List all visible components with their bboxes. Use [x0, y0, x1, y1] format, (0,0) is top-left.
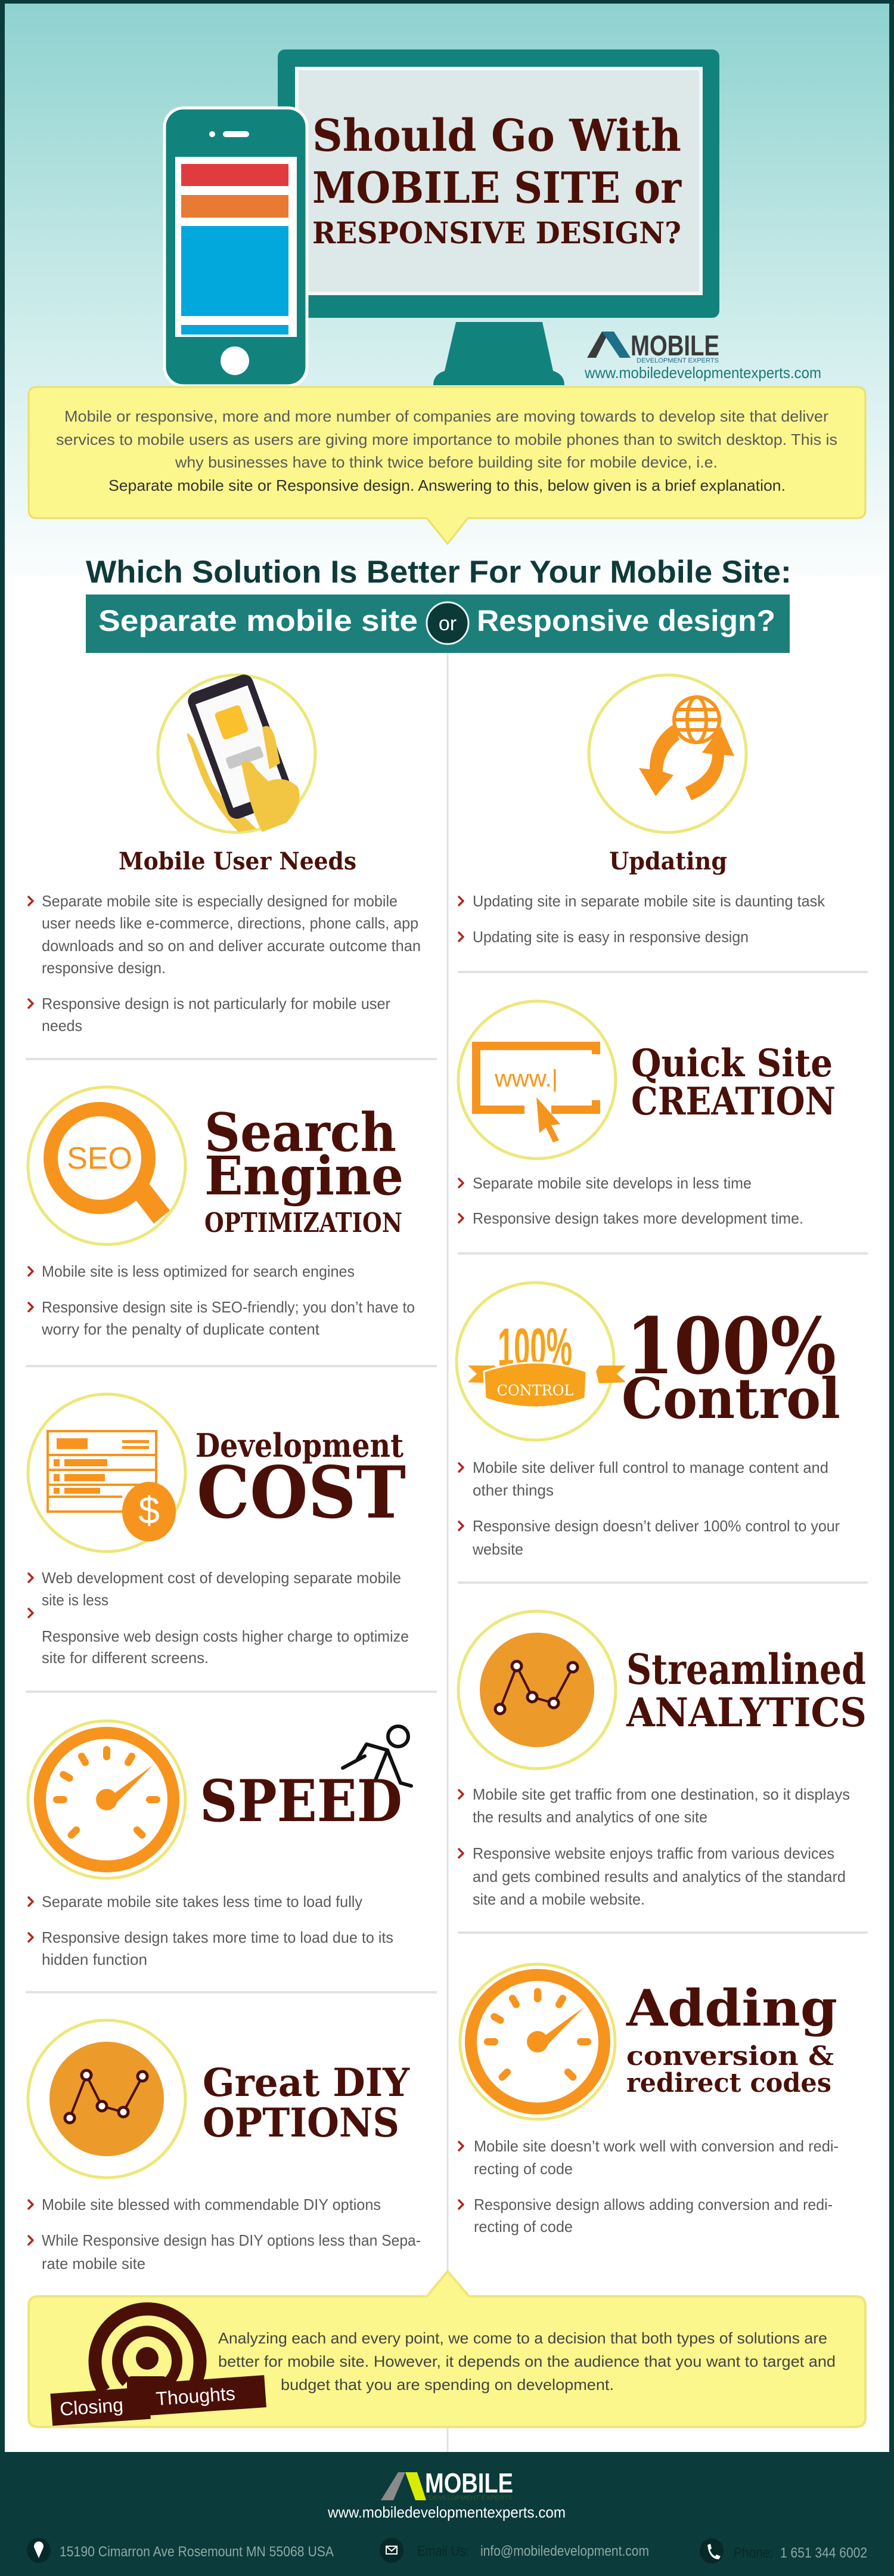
panel: search engine optimization: Mobile site is less optimized for search engines [42, 1262, 355, 1280]
icon: 100% control badge: 100% [498, 1318, 572, 1377]
panel: search engine optimization: OPTIMIZATION [204, 1207, 402, 1239]
panel: mobile user needs: downloads and so on and deliver accurate outcome than [42, 937, 421, 955]
callout: closing thoughts [29, 2271, 865, 2427]
contact: address: 15190 Cimarron Ave Rosemount MN 55068 USA [60, 2544, 334, 2560]
contact: address [27, 2538, 334, 2563]
panel: adding conversion & redirect codes: redirect codes [626, 2068, 831, 2098]
intro callout: Separate mobile site or Responsive design. Answering to this, below given is a brief explanation. [108, 476, 786, 494]
panel: speed: Separate mobile site takes less time to load fully [42, 1893, 362, 1911]
dividers [26, 971, 868, 1993]
panel: development cost: COST [197, 1451, 406, 1535]
panel: adding conversion & redirect codes: conversion & [626, 2041, 834, 2072]
panel: streamlined analytics [458, 1611, 867, 1908]
logo: mobile development experts: MOBILE [631, 330, 719, 362]
panel: development cost: Responsive web design costs higher charge to optimize [42, 1627, 409, 1645]
panel: 100% control: 100% [626, 1301, 836, 1392]
title: RESPONSIVE DESIGN? [312, 215, 681, 250]
intro callout [29, 387, 865, 544]
panel: development cost [28, 1394, 409, 1667]
panel: development cost: site for different screens. [42, 1649, 209, 1667]
banner: separate or responsive [86, 595, 790, 653]
panel: updating [459, 675, 825, 946]
panel: streamlined analytics: ANALYTICS [626, 1689, 867, 1736]
intro callout: Mobile or responsive, more and more number of companies are moving towards to develop site that deliver [64, 407, 828, 425]
panel: 100% control: Mobile site deliver full control to manage content and [473, 1459, 828, 1476]
icon: 100% control badge: CONTROL [497, 1382, 573, 1399]
panel: adding conversion & redirect codes: Responsive design allows adding conversion and redi- [474, 2196, 833, 2213]
icon: closing thoughts broadcast [50, 2309, 266, 2426]
panel: adding conversion & redirect codes: recting of code [474, 2160, 573, 2178]
panel: great DIY options: Great DIY [203, 2060, 410, 2106]
panel: adding conversion & redirect codes [459, 1964, 839, 2236]
panel: streamlined analytics: Mobile site get traffic from one destination, so it displays [473, 1785, 850, 1803]
panel: quick site creation: CREATION [631, 1079, 836, 1124]
panel: mobile user needs [29, 672, 421, 1035]
callout: closing thoughts: better for mobile site. However, it depends on the audience that you want to target and [218, 2352, 836, 2370]
icon: DIY chart [28, 2020, 185, 2178]
icon: desktop monitor [278, 49, 719, 385]
banner: separate or responsive: Separate mobile site [98, 604, 418, 637]
panel: speed: Responsive design takes more time to load due to its [42, 1928, 393, 1946]
contact: phone: 1 651 344 6002 [780, 2545, 867, 2561]
panel: development cost: Web development cost of developing separate mobile [42, 1569, 401, 1587]
panel: adding conversion & redirect codes: recting of code [474, 2218, 573, 2236]
icon: analytics chart [458, 1611, 616, 1769]
title: MOBILE SITE or [312, 162, 682, 213]
panel: speed: hidden function [42, 1950, 147, 1968]
panel: 100% control: Responsive design doesn’t deliver 100% control to your [473, 1517, 840, 1535]
panel: adding conversion & redirect codes: Mobile site doesn’t work well with conversion and redi- [474, 2137, 839, 2155]
icon: closing thoughts broadcast: Thoughts [155, 2383, 236, 2410]
callout: closing thoughts: Analyzing each and every point, we come to a decision that both types of solutions are [218, 2329, 827, 2347]
contact: phone [700, 2538, 867, 2563]
callout: closing thoughts: budget that you are spending on development. [281, 2376, 614, 2394]
panel: streamlined analytics: and gets combined results and analytics of the standard [473, 1868, 846, 1885]
title: Should Go With [312, 110, 681, 162]
footer: www.mobiledevelopmentexperts.com [327, 2503, 566, 2521]
panel: search engine optimization [28, 1087, 415, 1338]
panel: speed [28, 1721, 411, 1968]
panel: great DIY options: OPTIONS [203, 2100, 399, 2146]
logo: mobile development experts [584, 330, 821, 382]
logo: mobile development experts: DEVELOPMENT EXPERTS [637, 357, 719, 364]
icon: speedometer [28, 1721, 185, 1878]
panel: search engine optimization: Search [204, 1101, 396, 1163]
panel: updating: Updating site in separate mobile site is daunting task [473, 892, 825, 910]
panel: search engine optimization: Engine [204, 1144, 403, 1207]
panel: streamlined analytics: Responsive website enjoys traffic from various devices [473, 1844, 834, 1862]
icon: globe with refresh arrows [589, 675, 746, 832]
panel: 100% control: website [472, 1540, 523, 1558]
panel: great DIY options [28, 2020, 421, 2272]
footer logo [381, 2467, 513, 2501]
panel: speed: SPEED [200, 1767, 402, 1835]
vertical divider [447, 653, 448, 2452]
panel: search engine optimization: Responsive design site is SEO-friendly; you don’t have to [42, 1298, 415, 1316]
panel: great DIY options: Mobile site blessed with commendable DIY options [42, 2196, 381, 2213]
icon: mobile phone [164, 108, 307, 386]
icon: closing thoughts broadcast: Closing [59, 2394, 124, 2420]
panel: streamlined analytics: the results and analytics of one site [473, 1808, 707, 1826]
panel: updating: Updating [609, 847, 727, 875]
panel: streamlined analytics: Streamlined [626, 1645, 866, 1694]
icon: www browser with cursor: www.| [494, 1066, 558, 1092]
panel: development cost: Development [195, 1426, 404, 1465]
panel: mobile user needs: user needs like e-commerce, directions, phone calls, app [42, 914, 418, 932]
panel: 100% control: Control [622, 1366, 840, 1432]
icon: SEO magnifier: SEO [67, 1141, 132, 1176]
footer logo: MOBILE [425, 2467, 513, 2498]
header background [5, 4, 889, 576]
panel: 100% control: other things [473, 1481, 554, 1499]
icon: document with dollar coin: $ [138, 1489, 160, 1532]
icon: SEO magnifier [28, 1087, 185, 1244]
panel: updating: Updating site is easy in responsive design [473, 928, 749, 946]
panel: quick site creation: Quick Site [631, 1041, 833, 1086]
panel: quick site creation [458, 1001, 836, 1227]
footer [0, 2452, 894, 2576]
panel: development cost: site is less [42, 1591, 108, 1609]
panel: streamlined analytics: site and a mobile website. [473, 1890, 645, 1908]
panel: mobile user needs: needs [42, 1017, 82, 1035]
panel: quick site creation: Responsive design takes more development time. [473, 1209, 803, 1227]
banner: separate or responsive: or [439, 612, 457, 635]
panel: great DIY options: While Responsive design has DIY options less than Sepa- [42, 2231, 421, 2249]
panel: mobile user needs: responsive design. [42, 959, 166, 977]
contact: email [380, 2538, 649, 2563]
icon: document with dollar coin [28, 1394, 185, 1552]
panel: search engine optimization: worry for the penalty of duplicate content [41, 1320, 320, 1338]
banner: separate or responsive: Responsive design? [477, 604, 775, 637]
icon: runner [343, 1726, 411, 1786]
contact: email: Email Us: [417, 2543, 469, 2559]
intro callout: services to mobile users as users are giving more importance to mobile phones than to switch desktop. This is [56, 431, 837, 448]
panel: quick site creation: Separate mobile site develops in less time [473, 1174, 752, 1192]
icon: hand holding phone [158, 672, 315, 832]
section heading: Which Solution Is Better For Your Mobile Site: [86, 555, 791, 590]
panel: adding conversion & redirect codes: Adding [626, 1979, 837, 2038]
contact: phone: Phone: [734, 2545, 773, 2561]
footer logo: DEVELOPMENT EXPERTS [429, 2495, 513, 2501]
logo: mobile development experts: www.mobiledevelopmentexperts.com [584, 364, 821, 382]
panel: mobile user needs: Separate mobile site is especially designed for mobile [42, 892, 398, 910]
contact: email: info@mobiledevelopment.com [480, 2543, 649, 2559]
panel: mobile user needs: Responsive design is not particularly for mobile user [42, 995, 390, 1013]
intro callout: why businesses have to think twice before building site for mobile device, i.e. [175, 453, 718, 471]
panel: 100% control [457, 1283, 840, 1558]
icon: www browser with cursor [458, 1001, 616, 1159]
panel: great DIY options: rate mobile site [42, 2255, 145, 2272]
title [312, 110, 682, 250]
icon: 100% control badge [457, 1283, 626, 1440]
icon: gauge [460, 1964, 615, 2119]
panel: mobile user needs: Mobile User Needs [119, 847, 356, 875]
